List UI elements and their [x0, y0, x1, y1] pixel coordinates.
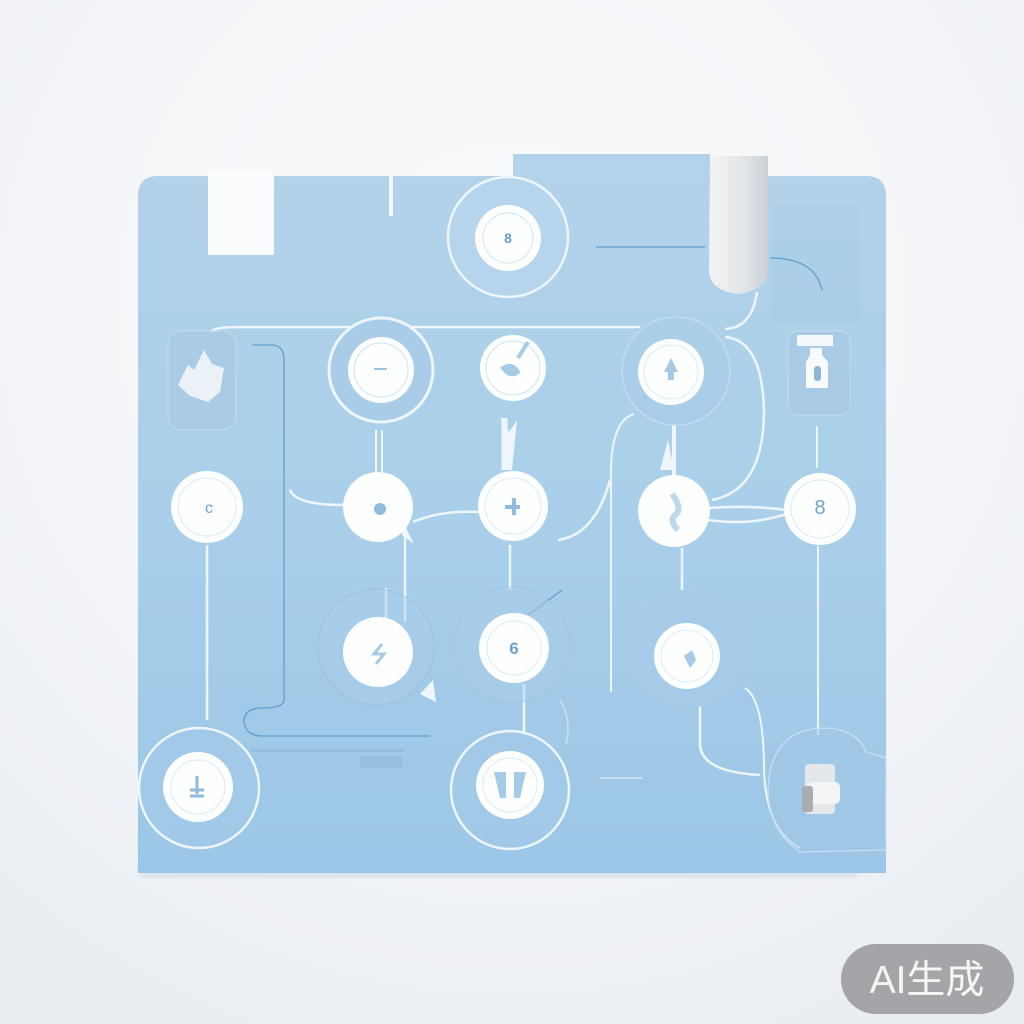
badge: AI generated: AI生成 [870, 959, 984, 1002]
node: row 3 right [628, 590, 746, 708]
node: row 2 left: c [205, 500, 213, 517]
node: row 2 fourth [638, 475, 710, 547]
node: row 2 third [478, 471, 548, 541]
badge: AI generated [841, 944, 1014, 1014]
node: row 2 right: 8 [814, 497, 826, 519]
node: bottom centre [451, 731, 569, 849]
icon: glass card with bottle [788, 331, 850, 415]
panel: main board [138, 154, 886, 873]
node: row 1 left [329, 318, 433, 422]
node: row 2 second [343, 472, 413, 542]
node: row 3 centre: 6 [509, 639, 519, 658]
node: row 2 right [784, 473, 856, 545]
node: bottom left [139, 728, 259, 848]
node: row 3 centre [454, 587, 570, 703]
blue accent lines [244, 247, 822, 736]
node: row 3 left [318, 589, 434, 705]
node: bottom right with clip [768, 728, 886, 852]
arrowheads [402, 418, 674, 702]
icon: glass card with flame [168, 331, 236, 430]
node: top centre: 8 [504, 230, 512, 246]
node: top centre [448, 177, 568, 297]
icon: white tape left [208, 171, 274, 255]
icon: grey tape right [709, 156, 768, 294]
connector lines [207, 292, 818, 848]
caption: faint label [250, 749, 404, 768]
node: row 2 left [171, 471, 243, 543]
node: row 1 right [622, 317, 730, 425]
node: row 1 centre [480, 335, 546, 401]
divider tick [389, 173, 393, 216]
